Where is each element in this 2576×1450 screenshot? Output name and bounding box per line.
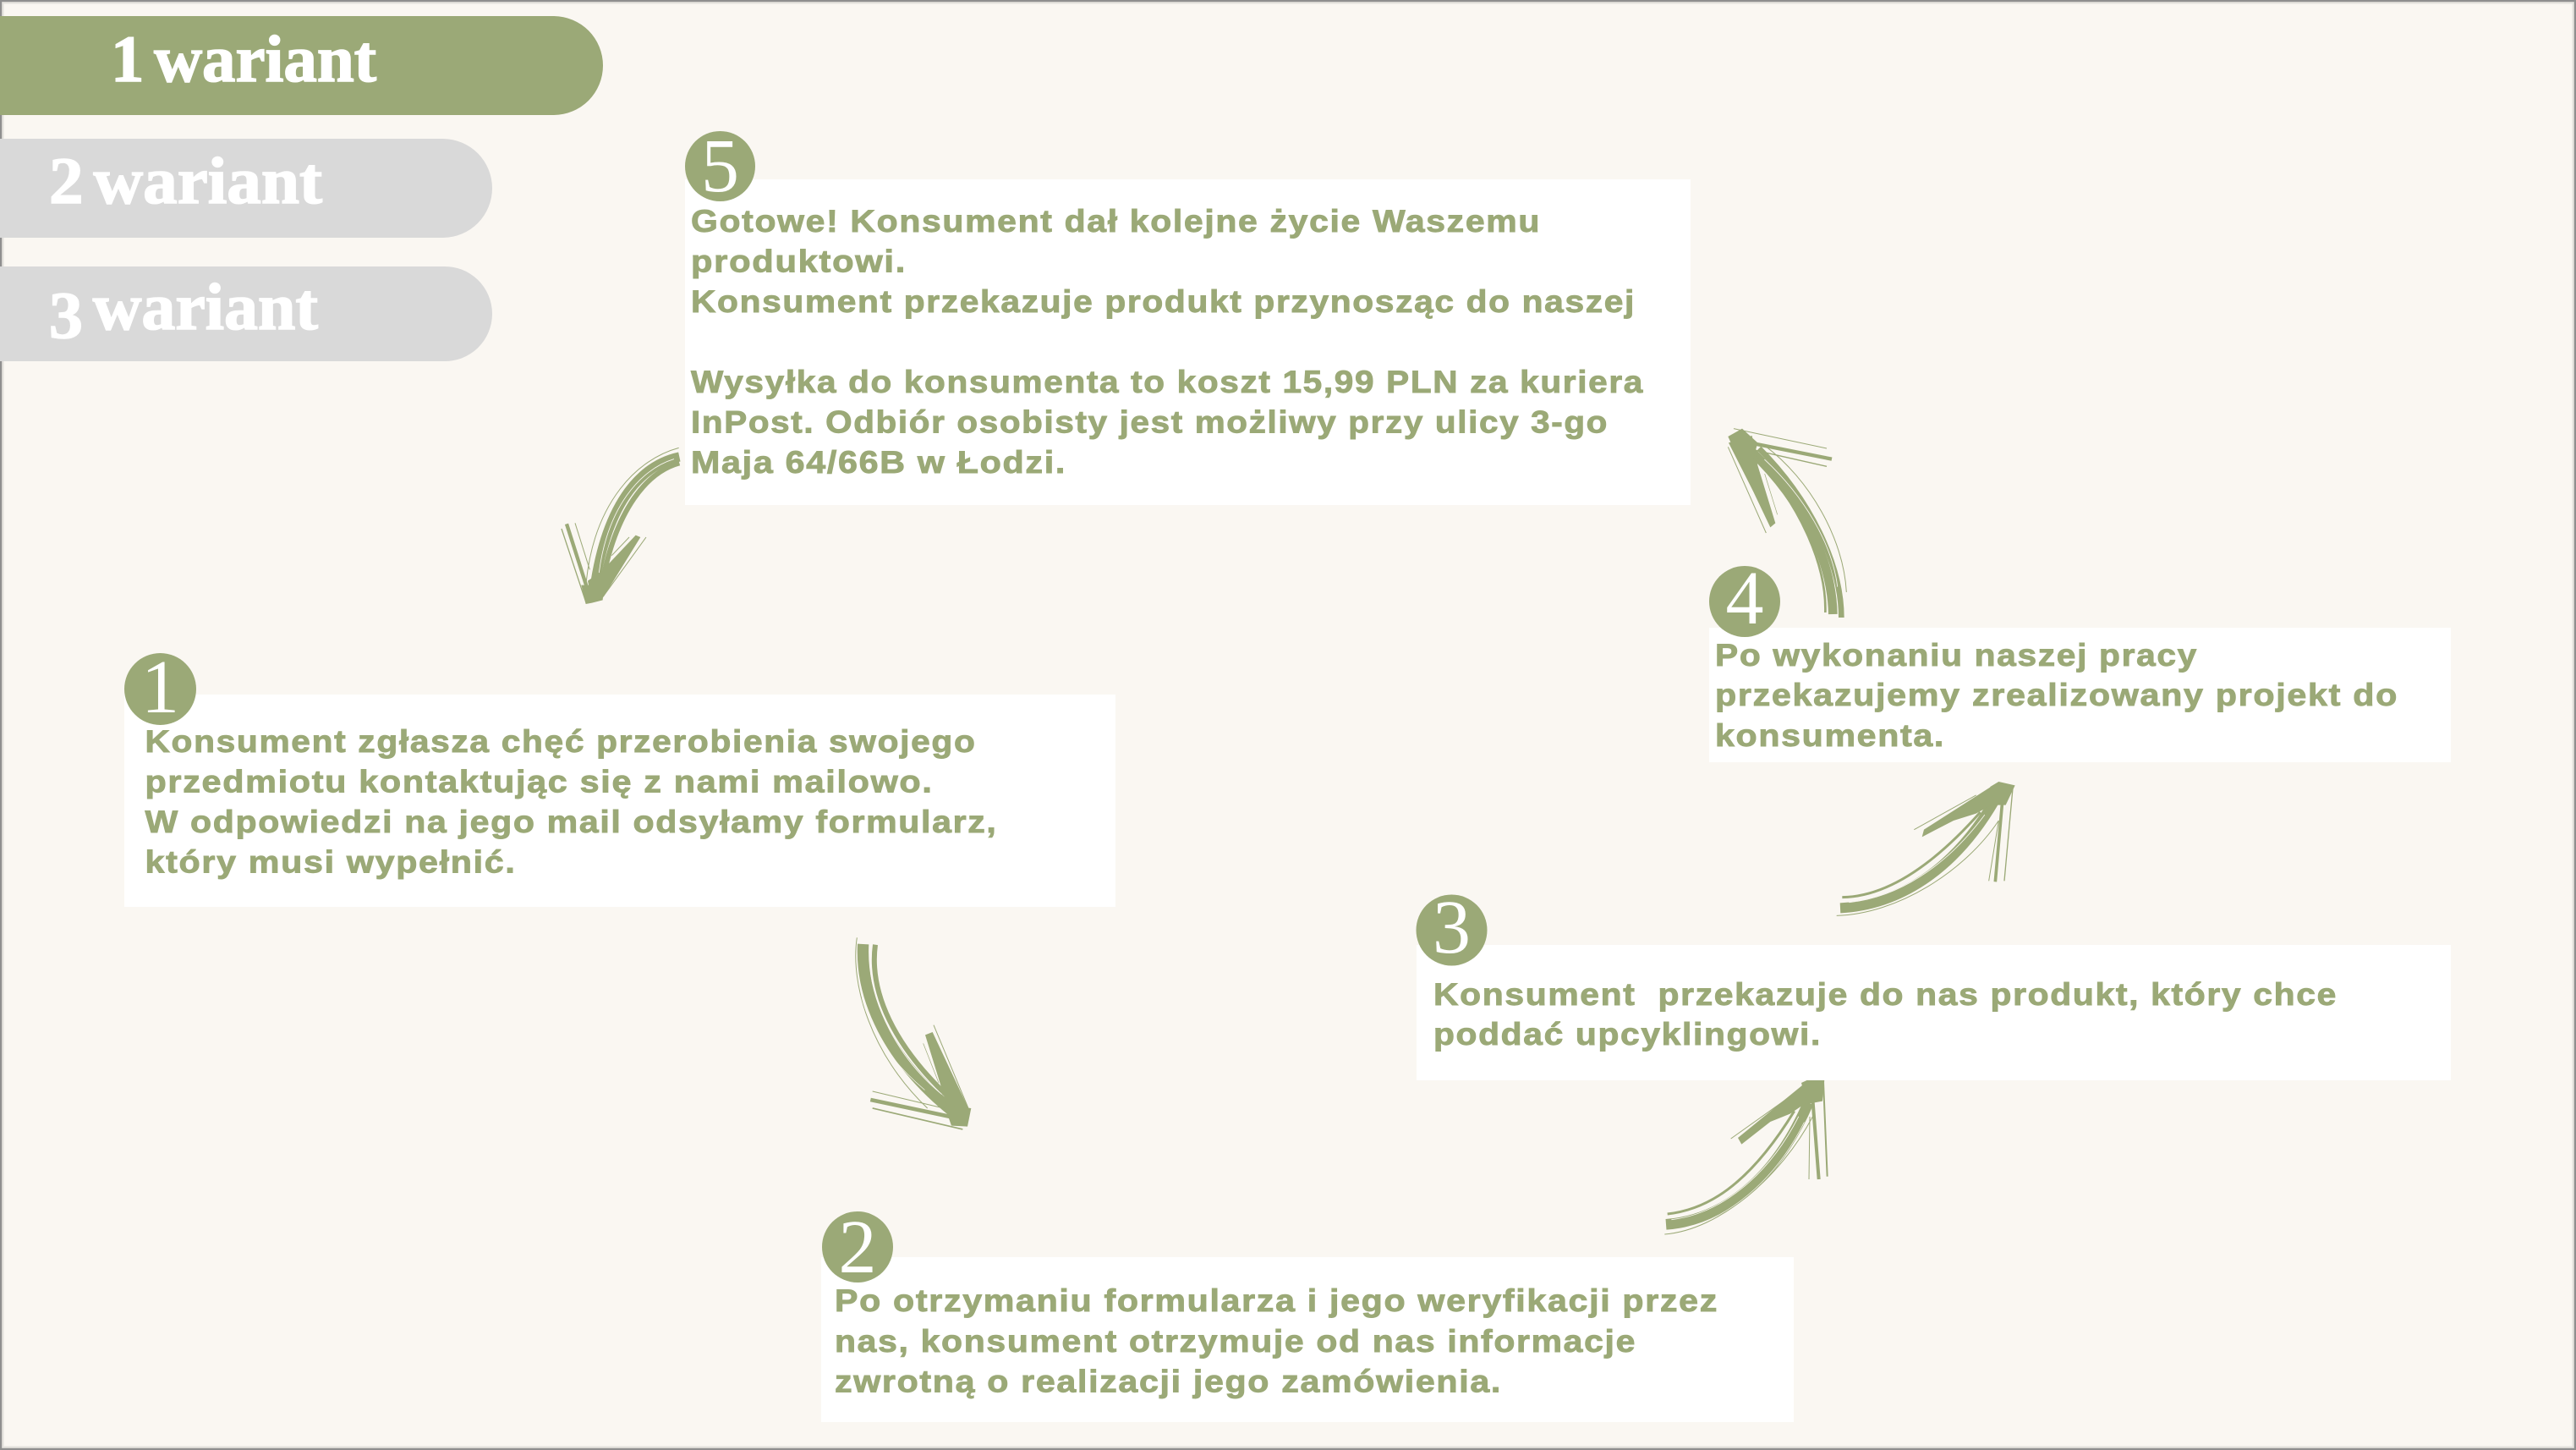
badge: number 2 (822, 1206, 893, 1289)
tab: 1 wariant: 1 wariant (111, 22, 376, 96)
panel: step 4 (1709, 557, 2451, 762)
badge: number 5: 5 (701, 124, 739, 208)
text: step 3 description: Konsument przekazuje do nas produkt, który chce (1433, 977, 2338, 1012)
tab: 1 wariant (0, 16, 603, 115)
text: step 2 description (835, 1283, 1718, 1399)
text: step 5 description (691, 204, 1644, 480)
text: step 5 description: Gotowe! Konsument dał kolejne życie Waszemu (691, 204, 1541, 239)
text: step 1 description: Konsument zgłasza chęć przerobienia swojego (145, 724, 976, 759)
panel: step 3 (1416, 886, 2451, 1080)
panel: step 1 (124, 645, 1115, 907)
badge: number 4 (1709, 557, 1780, 640)
text: step 2 description: Po otrzymaniu formularza i jego weryfikacji przez (835, 1283, 1718, 1318)
text: step 4 description (1715, 638, 2398, 753)
text: step 5 description: Konsument przekazuje produkt przynosząc do naszej (691, 284, 1636, 319)
tab: 2 wariant: 2 wariant (49, 144, 322, 217)
arrow: step 2 to step 3 (1664, 1079, 1828, 1234)
text: step 2 description: nas, konsument otrzymuje od nas informacje (835, 1324, 1636, 1359)
text: step 4 description: konsumenta. (1715, 718, 1945, 753)
badge: number 5 (685, 124, 755, 208)
text: step 1 description: który musi wypełnić. (145, 844, 516, 880)
tab: 3 wariant (0, 266, 492, 361)
panel: step 5 (685, 124, 1691, 505)
arrow: step 3 to step 4 (1837, 782, 2015, 915)
arrow: step 1 to step 2 (856, 937, 971, 1129)
text: step 4 description: Po wykonaniu naszej pracy (1715, 638, 2198, 673)
text: step 3 description (1433, 977, 2338, 1052)
text: step 1 description (145, 724, 998, 880)
text: step 5 description: Wysyłka do konsumenta to koszt 15,99 PLN za kuriera (691, 365, 1644, 399)
badge: number 1 (124, 645, 196, 729)
tab: 2 wariant (0, 139, 492, 238)
text: step 3 description: poddać upcyklingowi. (1433, 1017, 1822, 1052)
tab: 3 wariant: 3 (49, 278, 83, 352)
text: step 5 description: InPost. Odbiór osobisty jest możliwy przy ulicy 3-go (691, 404, 1609, 440)
text: step 1 description: W odpowiedzi na jego mail odsyłamy formularz, (145, 805, 998, 839)
badge: number 3 (1416, 886, 1487, 969)
panel: step 2 (821, 1206, 1794, 1422)
tab: 3 wariant: wariant (83, 270, 318, 343)
arrow: step 4 to step 5 (1728, 429, 1846, 618)
badge: number 2: 2 (839, 1206, 876, 1289)
text: step 1 description: przedmiotu kontaktując się z nami mailowo. (145, 765, 934, 799)
text: step 4 description: przekazujemy zrealizowany projekt do (1715, 678, 2398, 712)
text: step 5 description: Maja 64/66B w Łodzi. (691, 445, 1066, 480)
badge: number 3: 3 (1433, 886, 1471, 969)
badge: number 1: 1 (141, 645, 179, 729)
text: step 5 description: produktowi. (691, 244, 907, 279)
badge: number 4: 4 (1725, 557, 1764, 640)
arrow: step 5 to step 1 (562, 448, 679, 604)
text: step 2 description: zwrotną o realizacji jego zamówienia. (835, 1364, 1502, 1399)
